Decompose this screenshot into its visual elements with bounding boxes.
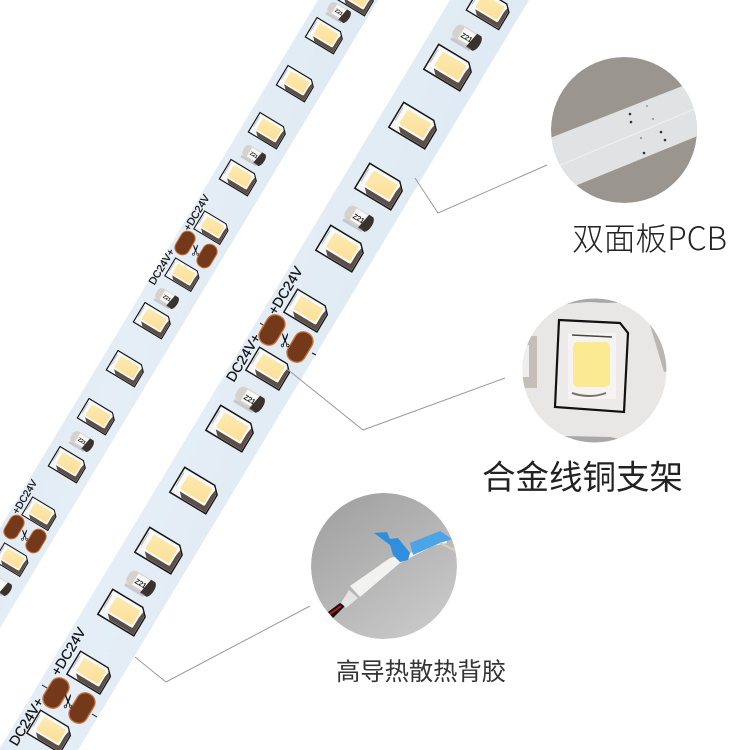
LED row, left strip — [0, 0, 376, 576]
resistors, right strip: Z21 — [242, 394, 256, 406]
panel: right LED strip — [0, 0, 529, 750]
solder pads and cut mark, upper joint — [147, 193, 220, 287]
circle: alloy copper bracket close-up — [516, 298, 672, 443]
resistors, left strip: Z21 — [334, 8, 344, 17]
solder pads and cut mark, upper joint: DC24V+ — [147, 247, 177, 287]
circle: thermal adhesive close-up — [311, 493, 458, 639]
callout line: PCB — [415, 165, 547, 213]
resistors, right strip: Z21 — [459, 32, 473, 44]
solder pads and cut mark, upper joint: +DC24V — [265, 263, 306, 317]
solder pads and cut mark, upper joint — [223, 263, 316, 384]
resistors, left strip — [0, 0, 353, 599]
solder pads and cut mark, lower joint: +DC24V — [48, 624, 89, 678]
solder pads and cut mark, upper joint: ✂ — [275, 332, 297, 348]
LED row, right strip — [27, 0, 512, 750]
resistors, left strip: Z21 — [77, 437, 87, 446]
callout line: adhesive — [135, 606, 310, 682]
circle: double-sided PCB close-up — [545, 57, 705, 203]
resistors, right strip: Z21 — [351, 213, 365, 225]
solder pads and cut mark, upper joint: ✂ — [187, 244, 205, 256]
solder pads and cut mark, lower joint: +DC24V — [11, 478, 40, 516]
resistors, right strip: Z21 — [133, 578, 147, 590]
solder pads and cut mark, lower joint: ✂ — [58, 693, 80, 709]
solder pads and cut mark, lower joint — [1, 478, 49, 556]
heading: thermal adhesive: 高导热散热背胶 — [336, 652, 506, 687]
heading: alloy copper bracket: 合金线铜支架 — [482, 450, 683, 499]
solder pads and cut mark, lower joint: ✂ — [16, 529, 34, 541]
callout line: copper bracket — [287, 369, 505, 430]
resistors, left strip: Z21 — [249, 151, 259, 160]
heading: double-sided PCB: 双面板PCB — [572, 214, 727, 260]
solder pads and cut mark, upper joint: +DC24V — [182, 193, 212, 233]
resistors, left strip: Z21 — [162, 294, 172, 303]
solder pads and cut mark, lower joint: DC24V+ — [6, 695, 47, 748]
panel: left LED strip — [0, 0, 378, 628]
solder pads and cut mark, upper joint: DC24V+ — [223, 331, 264, 384]
solder pads and cut mark, lower joint — [6, 624, 98, 748]
resistors, right strip — [122, 22, 484, 600]
